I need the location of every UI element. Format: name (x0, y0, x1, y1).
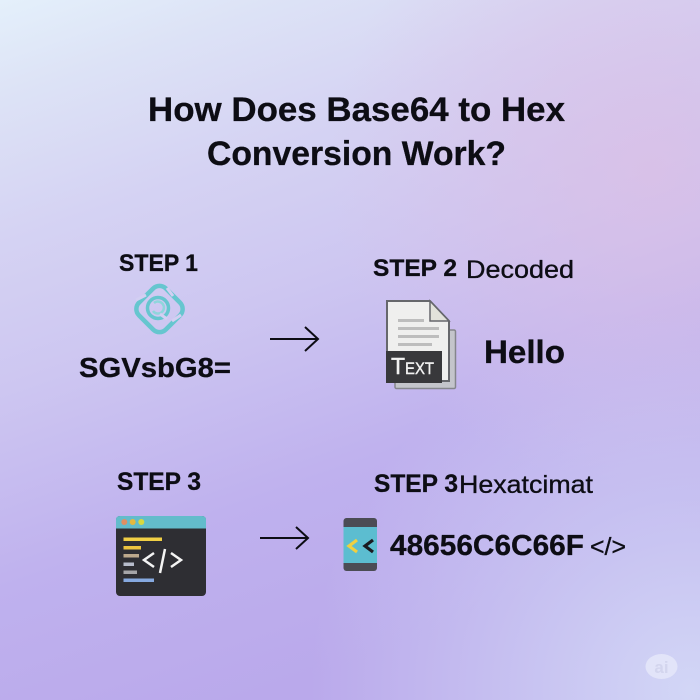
arrow: step 1 to step 2 (270, 327, 318, 351)
title: Conversion Work? (207, 135, 506, 173)
panel: step 3 right (344, 470, 626, 571)
arrow: step 3 to result (260, 527, 308, 549)
panel: step 1 (79, 250, 231, 383)
panel: step 3 left (116, 468, 206, 596)
icon: text document: EXT (405, 359, 434, 378)
icon: code window (116, 516, 206, 596)
watermark badge: ai (654, 658, 669, 677)
step 3 heading: STEP 3 (117, 468, 201, 496)
step 2 heading: STEP 2 (373, 255, 457, 282)
hexadecimal label: Hexatcimat (459, 471, 593, 499)
encoded value: SGVsbG8= (79, 352, 231, 383)
icon: base64 diamond (133, 282, 186, 336)
code symbol: </> (590, 533, 626, 561)
step 1 heading: STEP 1 (119, 250, 198, 277)
title (148, 91, 565, 173)
hex value: 48656C6C66F (390, 530, 584, 562)
icon: text document: T (391, 353, 405, 379)
icon: text document (386, 301, 456, 388)
panel: step 2 (373, 255, 574, 388)
decoded label: Decoded (466, 256, 574, 284)
watermark badge (646, 654, 678, 679)
icon: phone (344, 518, 377, 571)
hexadecimal heading: STEP 3 (374, 470, 458, 498)
title: How Does Base64 to Hex (148, 91, 565, 129)
decoded value: Hello (484, 334, 565, 370)
